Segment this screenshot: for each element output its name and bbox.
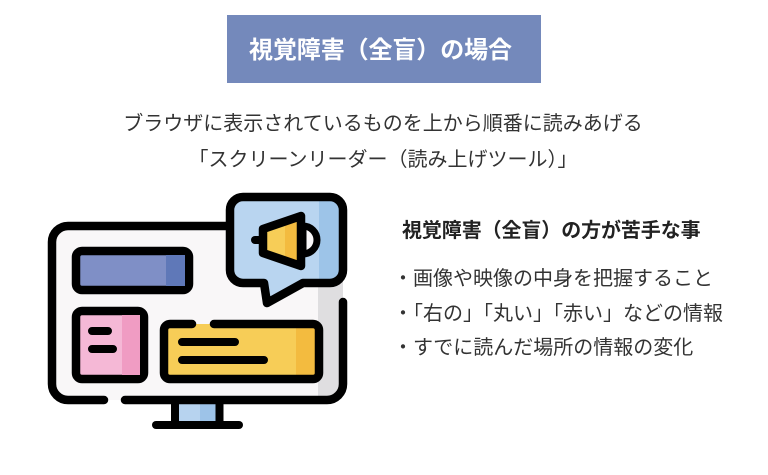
right heading: 視覚障害（全盲）の方が苦手な事 [402,220,700,242]
icon: megaphone [255,216,317,266]
description text: ブラウザに表示されているものを上から順番に読みあげる [123,113,643,135]
difficulty list: ・「右の」「丸い」「赤い」などの情報 [393,302,723,324]
blue header block [76,251,189,290]
speech bubble [230,197,343,303]
pink block [76,311,144,379]
yellow block [164,324,319,379]
difficulty list: ・すでに読んだ場所の情報の変化 [393,337,693,359]
difficulty list [393,268,723,359]
title text: 視覚障害（全盲）の場合 [249,37,512,64]
monitor stand [156,400,239,425]
monitor screen [52,226,343,400]
description text [123,112,643,171]
description text: 「スクリーンリーダー（読み上げツール）」 [188,149,578,171]
icon: monitor with speech bubble [48,192,348,429]
title banner [227,15,541,83]
difficulty list: ・画像や映像の中身を把握すること [393,268,713,290]
